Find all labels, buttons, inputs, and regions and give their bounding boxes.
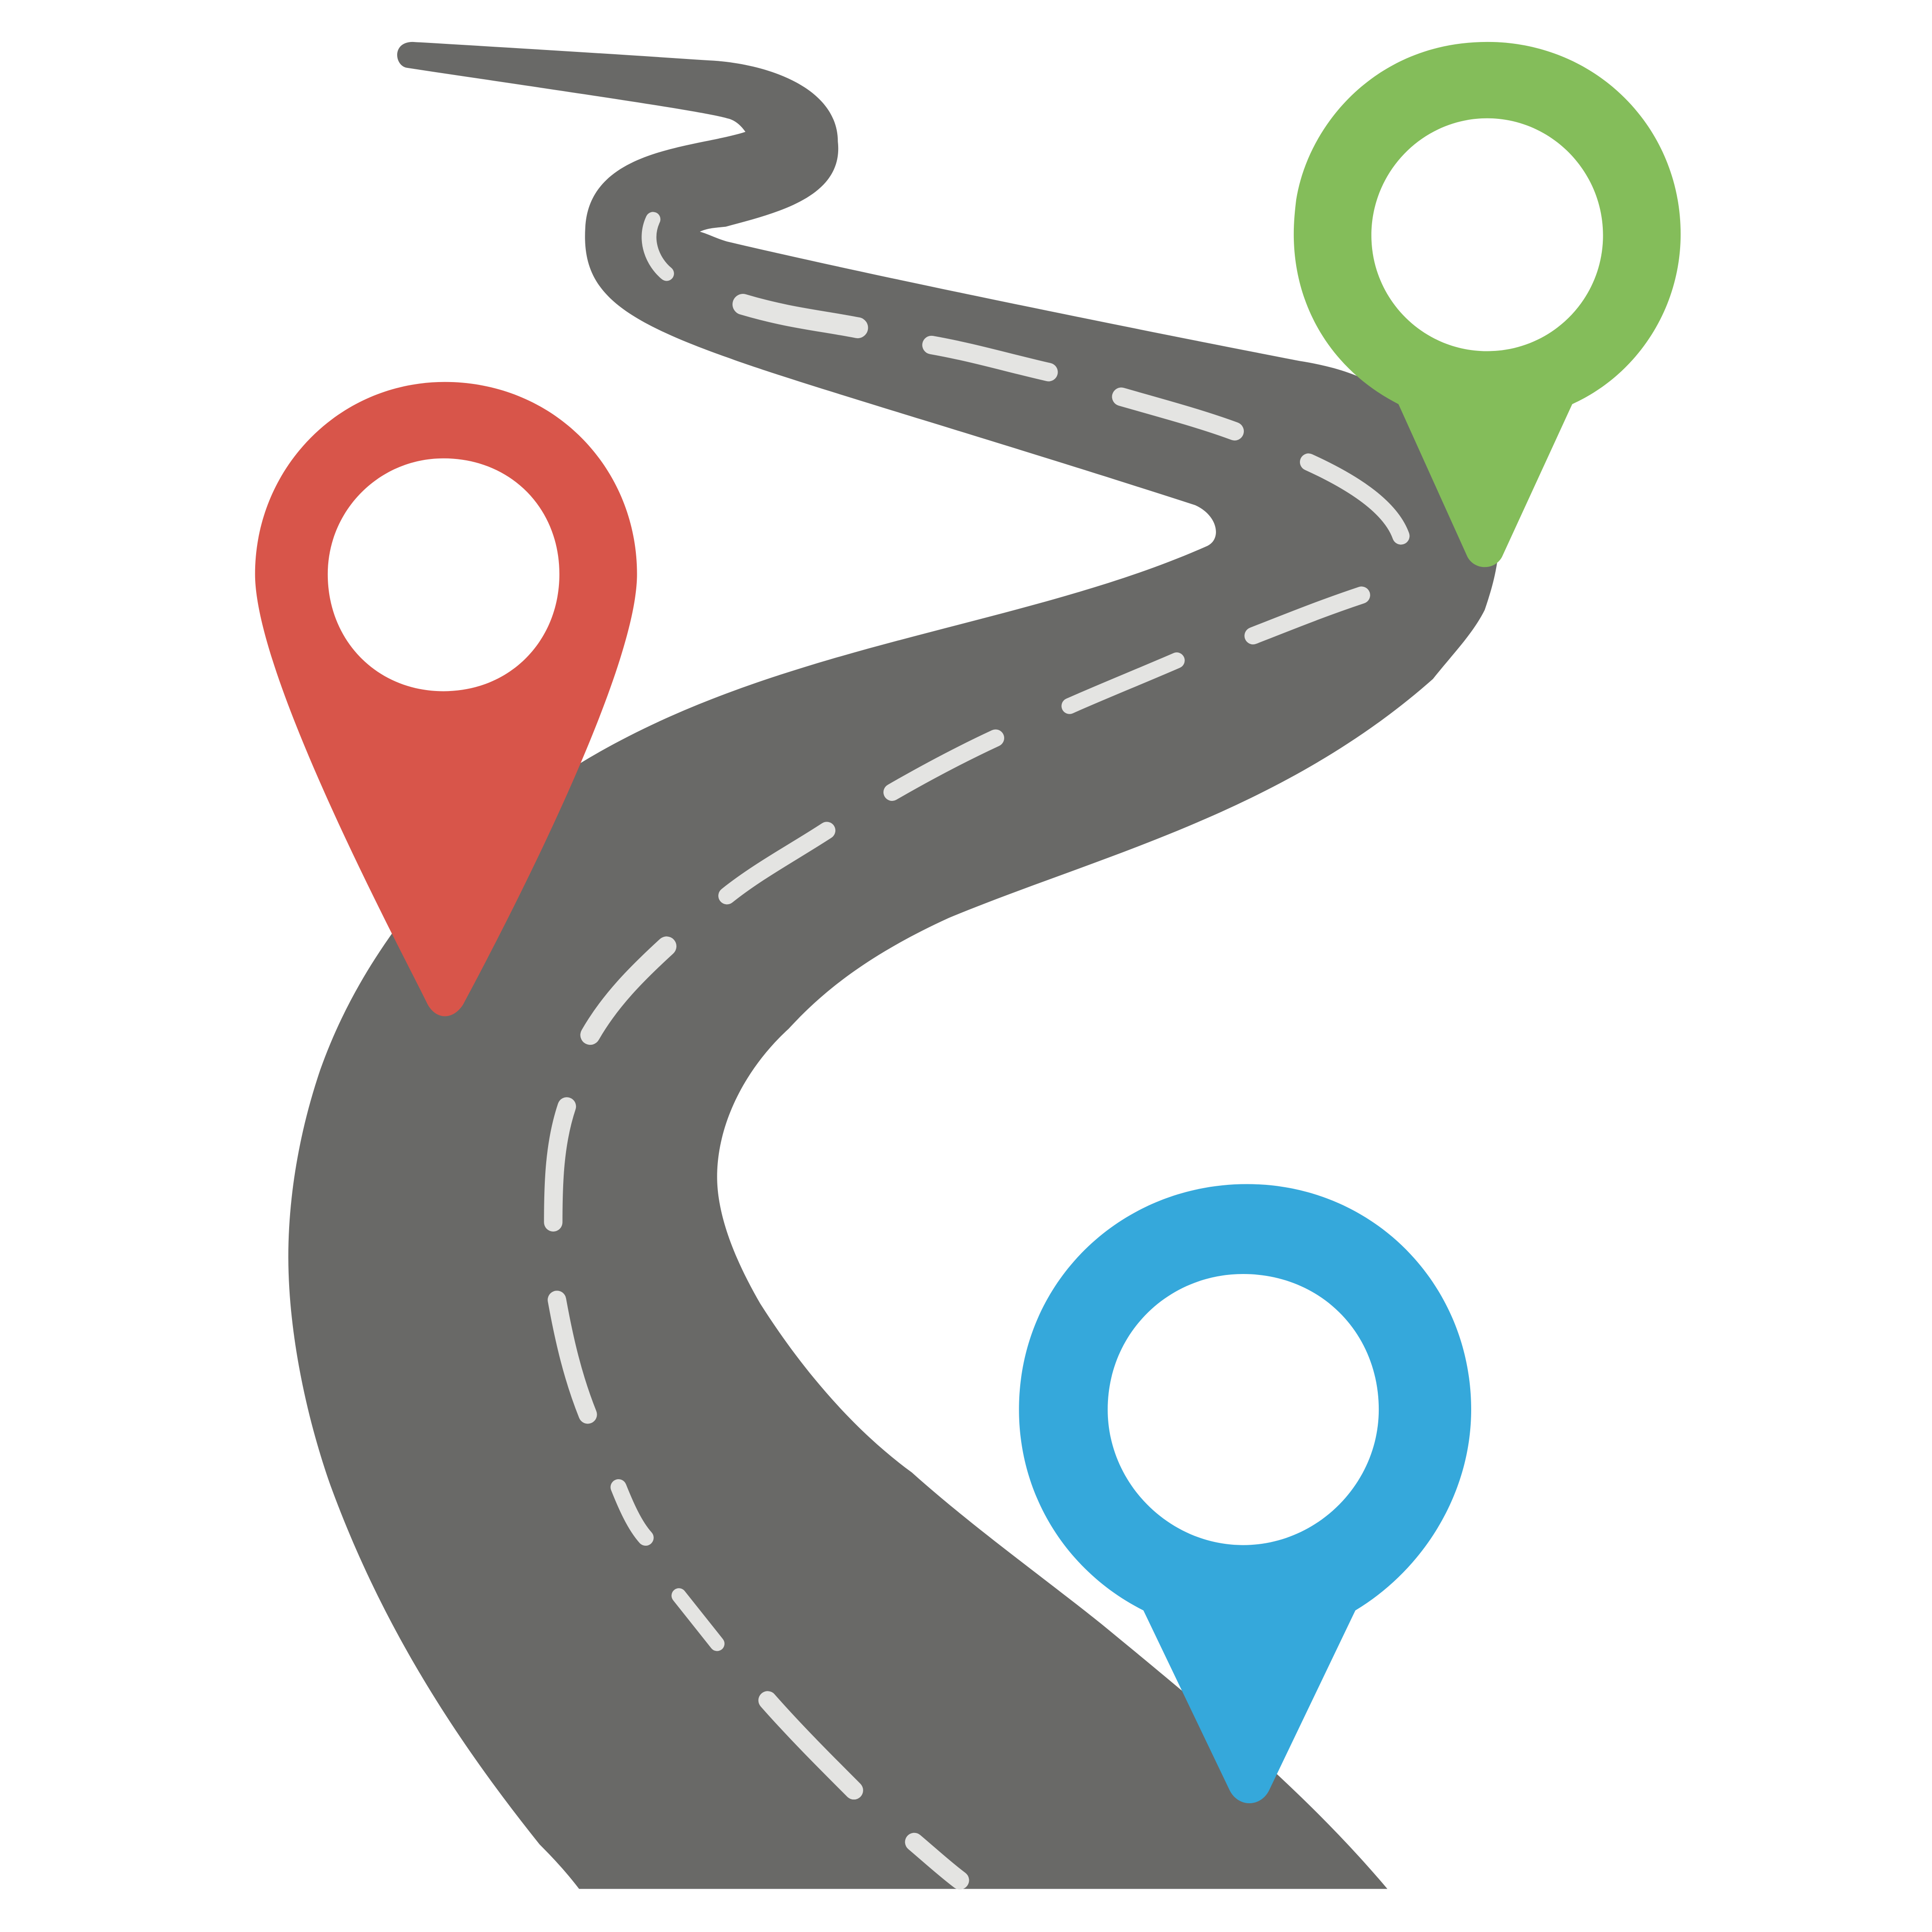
blue map pin: [1019, 1184, 1471, 1803]
road centre dashes: [553, 219, 1401, 1880]
green map pin: [1294, 42, 1681, 567]
red map pin: [255, 382, 637, 1016]
winding road: [288, 42, 1499, 1889]
